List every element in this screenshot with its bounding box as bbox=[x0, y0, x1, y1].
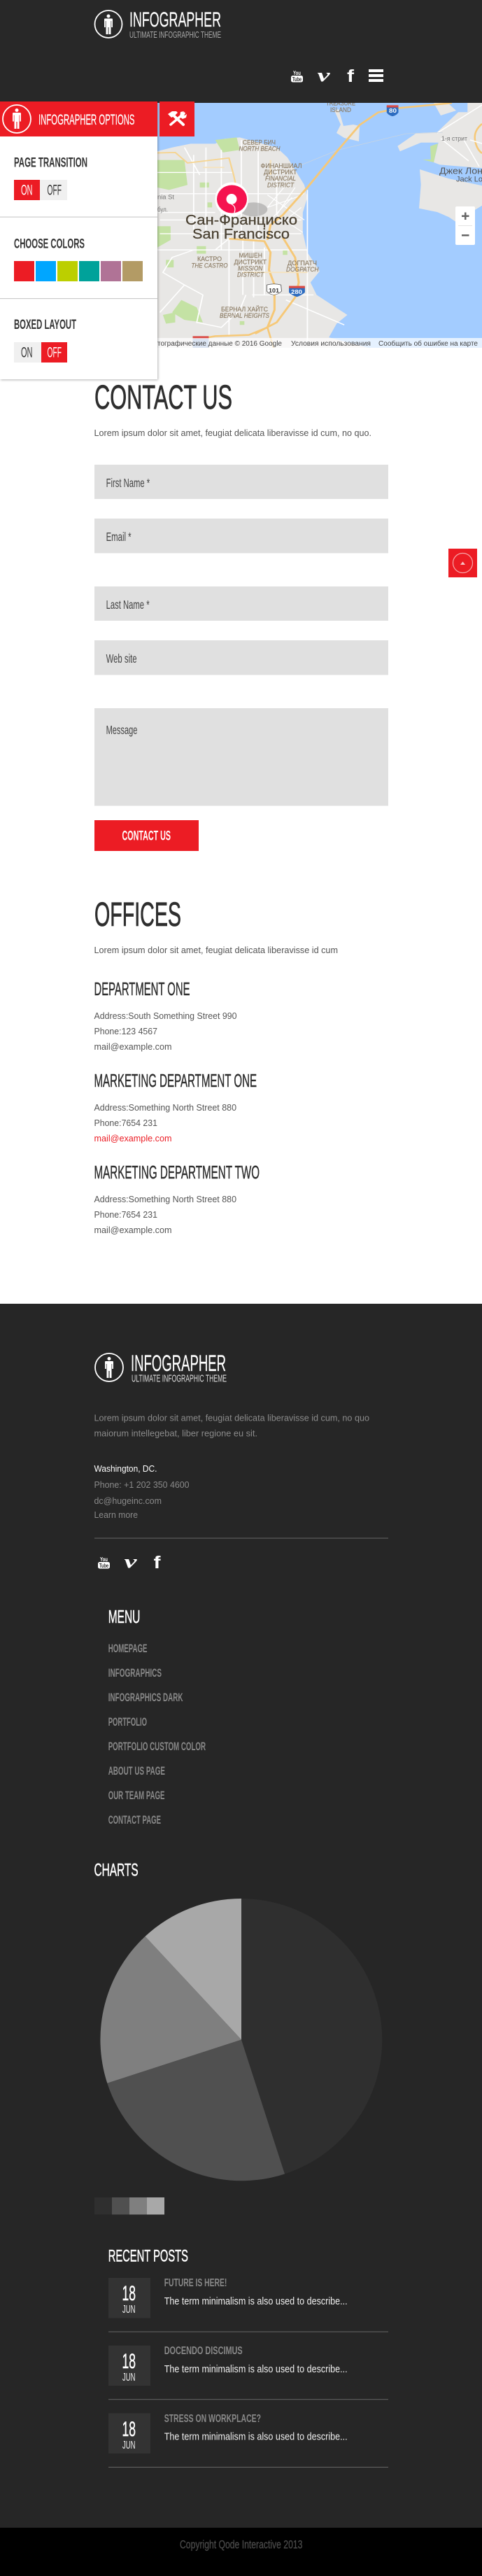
map bbox=[157, 103, 482, 348]
options header: INFOGRAPHER OPTIONS bbox=[38, 111, 134, 128]
chart legend bbox=[94, 2197, 164, 2214]
logo: ULTIMATE INFOGRAPHIC THEME bbox=[129, 29, 221, 40]
map labels: БЕРНАЛ ХАЙТС bbox=[221, 305, 268, 313]
footer menu list: INFOGRAPHICS bbox=[108, 1667, 162, 1680]
footer logo: ULTIMATE INFOGRAPHIC THEME bbox=[132, 1372, 227, 1384]
icon: youtube bbox=[291, 69, 303, 83]
footer contact details: Washington, DC. bbox=[94, 1463, 157, 1474]
map attribution: Условия использования bbox=[291, 340, 371, 348]
post: stress on workplace: STRESS ON WORKPLACE? bbox=[164, 2413, 261, 2425]
post: docendo discimus: 18 bbox=[122, 2350, 136, 2373]
contact intro: Lorem ipsum dolor sit amet, feugiat delicata liberavisse id cum, no quo. bbox=[94, 428, 371, 438]
office: marketing department two: Address:Something North Street 880 bbox=[94, 1194, 236, 1204]
field: message: Message bbox=[106, 723, 137, 737]
logo bbox=[95, 8, 221, 40]
map labels: 80 bbox=[389, 108, 397, 114]
office: department one bbox=[94, 978, 236, 1052]
footer icon: youtube: Tube bbox=[99, 1563, 108, 1569]
shield: 80 bbox=[387, 105, 398, 116]
shield: bottom 280 bbox=[193, 336, 208, 348]
map labels: ДИСТРИКТ bbox=[234, 259, 267, 266]
shield: 101 bbox=[267, 284, 281, 295]
field: last name bbox=[94, 586, 388, 621]
map labels: DISTRICT bbox=[267, 182, 295, 189]
map city label: San Francisco bbox=[192, 227, 290, 242]
options header bbox=[0, 101, 157, 136]
office: marketing department one: MARKETING DEPARTMENT ONE bbox=[94, 1070, 257, 1091]
map labels: МИШЕН bbox=[239, 252, 262, 259]
map attribution bbox=[157, 338, 482, 348]
contact form bbox=[94, 465, 388, 851]
map labels: NORTH BEACH bbox=[239, 145, 281, 152]
map labels: ФИНАНШИАЛ bbox=[260, 162, 302, 169]
map labels bbox=[157, 100, 482, 319]
heading: choose colors: CHOOSE COLORS bbox=[14, 237, 85, 252]
header bbox=[0, 0, 482, 103]
footer menu list: HOMEPAGE bbox=[108, 1642, 147, 1655]
map labels: ДОГПАТЧ bbox=[288, 260, 317, 267]
scroll to top button bbox=[448, 549, 477, 577]
office: marketing department one bbox=[94, 1070, 257, 1143]
map labels: 1-я стрит bbox=[441, 135, 467, 142]
footer menu list bbox=[108, 1642, 206, 1827]
map labels: КАСТРО bbox=[197, 255, 222, 262]
toggle: page transition bbox=[14, 180, 67, 200]
offices intro: Lorem ipsum dolor sit amet, feugiat delicata liberavisse id cum bbox=[94, 945, 338, 955]
map labels: 101 bbox=[269, 288, 280, 294]
footer bbox=[0, 1304, 482, 2528]
map labels: FINANCIAL bbox=[265, 175, 296, 182]
footer icon: vimeo: v bbox=[125, 1551, 137, 1572]
map labels: 280 bbox=[291, 289, 303, 295]
post: future is here: JUN bbox=[122, 2304, 135, 2316]
footer icon: youtube bbox=[98, 1556, 110, 1569]
office: marketing department one: Phone:7654 231 bbox=[94, 1118, 157, 1128]
map labels: ДИСТРИКТ bbox=[264, 169, 297, 176]
map labels: бул. bbox=[157, 206, 168, 213]
toggle: page transition: OFF bbox=[48, 183, 62, 199]
office: marketing department one: mail@example.com bbox=[94, 1133, 172, 1143]
map labels: Джек Лон bbox=[439, 166, 482, 176]
footer icon: youtube: You bbox=[100, 1556, 108, 1563]
field: first name bbox=[94, 465, 388, 499]
office: marketing department one: Address:Something North Street 880 bbox=[94, 1102, 236, 1113]
map labels: ISLAND bbox=[330, 106, 351, 113]
post: docendo discimus: JUN bbox=[122, 2372, 135, 2384]
field: last name: Last Name * bbox=[106, 598, 150, 612]
office: department one: Phone:123 4567 bbox=[94, 1026, 157, 1036]
copyright bar bbox=[0, 2528, 482, 2576]
shield: 280 bbox=[289, 286, 305, 297]
heading: page transition: PAGE TRANSITION bbox=[14, 155, 87, 171]
map labels: СЕВЕР БИЧ bbox=[243, 139, 276, 146]
options toggle button bbox=[160, 101, 194, 136]
heading: boxed layout: BOXED LAYOUT bbox=[14, 317, 76, 332]
copyright bar: Copyright Qode Interactive 2013 bbox=[180, 2538, 302, 2552]
map marker pin bbox=[215, 182, 248, 222]
footer menu list: INFOGRAPHICS DARK bbox=[108, 1691, 183, 1704]
map labels: BERNAL HEIGHTS bbox=[220, 312, 269, 319]
post: future is here: The term minimalism is also used to describe... bbox=[164, 2295, 348, 2307]
footer contact details: dc@hugeinc.com bbox=[94, 1495, 162, 1506]
logo: INFOGRAPHER bbox=[129, 8, 221, 31]
footer about text bbox=[94, 1413, 369, 1438]
submit button: CONTACT US bbox=[122, 829, 171, 844]
footer contact details bbox=[94, 1463, 189, 1520]
map attribution: тографические данные © 2016 Google bbox=[157, 339, 282, 348]
post: docendo discimus: DOCENDO DISCIMUS bbox=[164, 2345, 243, 2357]
post: stress on workplace: 18 bbox=[122, 2418, 136, 2441]
office: marketing department two: mail@example.com bbox=[94, 1225, 172, 1235]
panel: infographer options bbox=[0, 101, 157, 379]
pie chart bbox=[100, 1899, 382, 2181]
office: marketing department two bbox=[94, 1162, 260, 1235]
heading: contact us: CONTACT US bbox=[94, 379, 232, 416]
map labels: THE CASTRO bbox=[192, 262, 228, 269]
footer contact details: Learn more bbox=[94, 1509, 138, 1520]
map labels: DOGPATCH bbox=[286, 266, 319, 273]
map labels: nia St bbox=[157, 194, 175, 201]
footer menu list: CONTACT PAGE bbox=[108, 1814, 161, 1827]
footer logo: INFOGRAPHER bbox=[131, 1351, 226, 1376]
icon: youtube: You bbox=[293, 69, 301, 76]
post: stress on workplace: The term minimalism is also used to describe... bbox=[164, 2431, 348, 2443]
map attribution: Сообщить об ошибке на карте bbox=[378, 339, 478, 348]
map city label: Сан-Франциско bbox=[185, 213, 297, 228]
post: future is here: FUTURE IS HERE! bbox=[164, 2277, 227, 2289]
map labels: TREASURE bbox=[326, 100, 355, 107]
east bay land bbox=[334, 103, 482, 222]
heading: offices: OFFICES bbox=[94, 896, 181, 934]
field: first name: First Name * bbox=[106, 476, 150, 490]
field: email bbox=[94, 519, 388, 553]
submit button bbox=[94, 820, 199, 851]
post: docendo discimus: The term minimalism is also used to describe... bbox=[164, 2363, 348, 2375]
post: docendo discimus bbox=[108, 2345, 348, 2386]
footer menu list: PORTFOLIO CUSTOM COLOR bbox=[108, 1740, 206, 1753]
office: department one: DEPARTMENT ONE bbox=[94, 978, 190, 999]
toggle: boxed layout bbox=[14, 342, 67, 363]
footer about text: maiorum intellegebat, liber regione eu sit. bbox=[94, 1428, 257, 1438]
post: future is here bbox=[108, 2277, 348, 2318]
toggle: page transition: ON bbox=[21, 183, 32, 199]
icon: facebook: f bbox=[347, 66, 355, 86]
toggle: boxed layout: ON bbox=[21, 345, 32, 361]
footer contact details: Phone: +1 202 350 4600 bbox=[94, 1479, 189, 1490]
post: stress on workplace: JUN bbox=[122, 2440, 135, 2451]
field: email: Email * bbox=[106, 530, 132, 544]
toggle: boxed layout: OFF bbox=[48, 345, 62, 361]
field: web site bbox=[94, 640, 388, 675]
post: stress on workplace bbox=[108, 2413, 348, 2454]
map zoom control bbox=[455, 206, 475, 245]
map city label bbox=[186, 214, 297, 239]
footer menu list: ABOUT US PAGE bbox=[108, 1765, 165, 1778]
map labels: Jack Lo bbox=[456, 176, 482, 184]
footer menu list: PORTFOLIO bbox=[108, 1716, 147, 1729]
footer icon: facebook: f bbox=[154, 1553, 161, 1572]
heading: recent posts: RECENT POSTS bbox=[108, 2246, 188, 2265]
footer menu list: OUR TEAM PAGE bbox=[108, 1789, 165, 1802]
map pin shadow bbox=[240, 202, 267, 216]
footer logo bbox=[95, 1351, 227, 1384]
icon: menu bbox=[369, 69, 383, 82]
icon: vimeo: v bbox=[318, 65, 330, 85]
icon: youtube: Tube bbox=[292, 76, 302, 83]
field: web site: Web site bbox=[106, 652, 137, 666]
field: message bbox=[94, 708, 388, 806]
map labels: DISTRICT bbox=[237, 271, 264, 278]
heading: menu: MENU bbox=[108, 1606, 140, 1627]
office: marketing department two: MARKETING DEPARTMENT TWO bbox=[94, 1162, 260, 1183]
heading: charts: CHARTS bbox=[94, 1860, 139, 1880]
office: marketing department two: Phone:7654 231 bbox=[94, 1209, 157, 1220]
colour swatches bbox=[14, 261, 143, 281]
footer about text: Lorem ipsum dolor sit amet, feugiat delicata liberavisse id cum, no quo bbox=[94, 1413, 369, 1423]
office: department one: Address:South Something Street 990 bbox=[94, 1011, 236, 1021]
post: future is here: 18 bbox=[122, 2282, 136, 2305]
office: department one: mail@example.com bbox=[94, 1041, 172, 1052]
map labels: MISSION bbox=[238, 265, 263, 272]
